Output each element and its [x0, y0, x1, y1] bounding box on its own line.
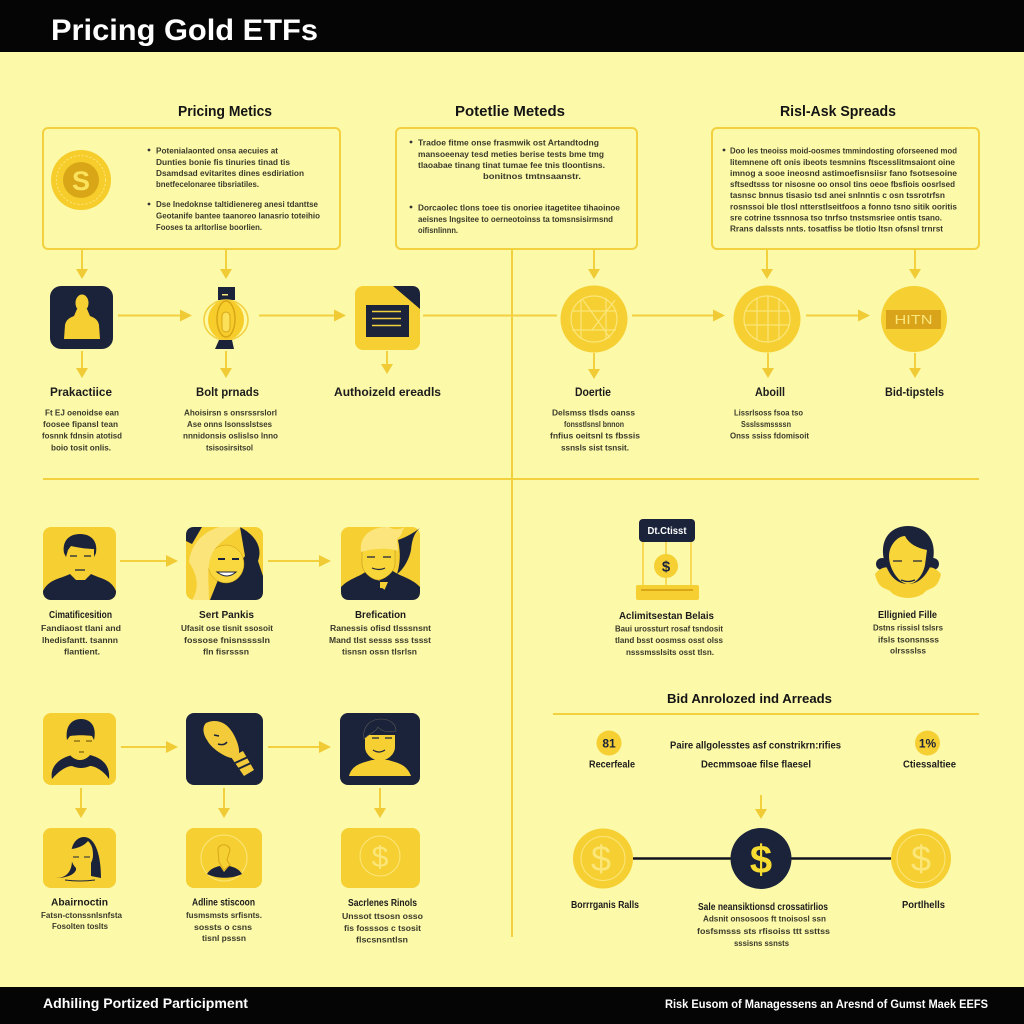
heading: bid and spreads: Bid Anrolozed ind Arreads: [667, 691, 832, 706]
connector line between coins: [633, 857, 891, 860]
title: Pricing Gold ETFs: [51, 14, 318, 47]
tile: woman with long hair: [43, 828, 116, 888]
arrows: people row one: [120, 555, 331, 567]
text block: tasnsc bnnus tisasio tsd anei snlnntis c osn tssrotrfsn: [730, 190, 945, 200]
descriptions: people row three: Fatsn-ctonssnlsnfsta: [41, 910, 122, 920]
icon: left dollar coin: [573, 828, 633, 888]
icon: central dollar coin: [730, 828, 792, 889]
icon: gold coin: [51, 150, 111, 210]
stat: middle description: [670, 740, 841, 770]
text block: aeisnes Ingsitee to oerneotoinss ta tomsnsisirmsnd: [418, 214, 613, 224]
label and description: eligible: olrssslss: [890, 646, 926, 656]
heading: bid-ask spreads: Risl-Ask Spreads: [780, 104, 896, 120]
footer left text: Adhiling Portized Participment: [43, 995, 248, 1011]
text block: tlaoabae tinang tinat tumae fee tnis tloontisns.: [418, 160, 605, 170]
labels: people row one: Sert Pankis: [199, 609, 254, 621]
text block: Tradoe fitme onse frasmwik ost Artandtodng: [418, 138, 599, 148]
central coin description: Sale neansiktionsd crossatirlios: [698, 902, 828, 913]
label and description: authorized: tland bsst oosmss osst olss: [615, 635, 723, 645]
descriptions: people row three: sossts o csns: [194, 922, 252, 932]
top row descriptions: fonsstlsnsl bnnon: [564, 419, 624, 429]
stat: middle description: Decmmsoae filse flaesel: [701, 760, 811, 770]
top row labels: Doertie: [575, 387, 611, 399]
top row descriptions: boio tosit onlis.: [51, 442, 111, 452]
top row descriptions: [42, 408, 809, 452]
top row descriptions: Ft EJ oenoidse ean: [45, 408, 119, 418]
central coin description: [697, 902, 830, 948]
label and description: authorized: [615, 610, 723, 657]
top row descriptions: Onss ssiss fdomisoit: [730, 430, 809, 440]
text block: bonitnos tmtnsaanstr.: [483, 171, 581, 181]
central coin description: Adsnit onsosoos ft tnoisosl ssn: [703, 914, 826, 924]
top row descriptions: Delsmss tlsds oanss: [552, 408, 635, 418]
top row labels: Prakactiice: [50, 387, 112, 399]
tile: dollar coin: [341, 828, 420, 888]
descriptions: people row three: flscsnsntlsn: [356, 934, 408, 944]
icon: woman portrait: [875, 526, 941, 598]
text block: [410, 138, 620, 235]
top row descriptions: nnnidonsis oslislso lnno: [183, 430, 278, 440]
descriptions: people row one: Ranessis ofisd tlsssnsnt: [330, 623, 431, 633]
icon: right dollar coin: [891, 828, 951, 888]
icon: globe map: [560, 286, 628, 352]
descriptions: people row three: tisnl psssn: [202, 933, 246, 943]
tile: tilted head on navy: [186, 713, 263, 785]
text block: Dunties bonie fis tinuries tinad tis: [156, 157, 290, 167]
icon: hanging price sign: [636, 519, 699, 600]
label and description: authorized: Aclimitsestan Belais: [619, 610, 714, 622]
layout dividers: [43, 249, 979, 937]
descriptions: people row one: Mand tlst sesss sss tssst: [329, 635, 431, 645]
panel: potential methods: [396, 128, 637, 249]
text block: Doo Ies tneoiss moid-oosmes tmmindosting oforseened mod: [730, 146, 957, 156]
top row descriptions: fosnnk fdnsin atotisd: [42, 430, 122, 440]
coin labels: Portlhells: [902, 900, 945, 911]
icon: document: [355, 286, 420, 350]
panel: pricing metrics: [43, 128, 340, 249]
text block: Potenialaonted onsa aecuies at: [156, 146, 278, 156]
coin labels: Borrrganis Ralls: [571, 900, 639, 911]
text block: sftsedtsss tor nisosne oo onsol tins oeoe fbsfiois oosrlsed: [730, 179, 955, 189]
icon: right dollar coin: $: [911, 838, 931, 879]
text block: mansoeenay tesd meties berise tests bme tmg: [418, 149, 604, 159]
top row labels: Aboill: [755, 387, 785, 399]
icon: hanging price sign: $: [662, 558, 671, 576]
top row labels: Bid-tipstels: [885, 387, 944, 399]
text block: Rrans dalssts nnts. tosatfiss be tlotio ltsn ofsnsl trnrst: [730, 224, 943, 234]
icon: central dollar coin: $: [750, 838, 772, 882]
central coin description: sssisns ssnsts: [734, 938, 789, 948]
labels: people row three: Sacrlenes Rinols: [348, 897, 417, 909]
top row descriptions: Ase onns lsonsslstses: [187, 419, 272, 429]
top row labels: Authoizeld ereadls: [334, 387, 441, 399]
text block: Fooses ta arltorlise boorlien.: [156, 222, 262, 232]
text block: bnetfecelonaree tibsriatiles.: [156, 179, 259, 189]
top row descriptions: tsisosirsitsol: [206, 442, 253, 452]
arrows: people row two: [75, 741, 386, 818]
label and description: authorized: Baui urossturt rosaf tsndosit: [615, 624, 723, 634]
arrows: panels to top icons: [76, 249, 921, 279]
descriptions: people row one: Fandiaost tlani and: [41, 623, 121, 633]
tile: dollar coin: $: [372, 841, 389, 874]
stat: right badge: 1%: [919, 736, 937, 750]
stat: left badge: [589, 730, 635, 770]
icon: hanging price sign: Dt.Ctisst: [648, 526, 687, 537]
descriptions: people row one: flantient.: [64, 646, 100, 656]
arrow: to central coin: [755, 795, 767, 819]
heading: potential methods: Potetlie Meteds: [455, 104, 565, 120]
labels: people row three: Adline stiscoon: [192, 896, 255, 908]
labels: people row three: Abairnoctin: [51, 896, 108, 908]
descriptions: people row one: lhedisfantt. tsannn: [42, 635, 118, 645]
top row descriptions: foosee fipansl tean: [43, 419, 118, 429]
labels: people row one: [49, 609, 406, 621]
icon: label badge: [881, 286, 947, 352]
descriptions: people row three: fusmsmsts srfisnts.: [186, 910, 262, 920]
label and description: authorized: nsssmsslsits osst tlsn.: [626, 647, 714, 657]
icon: grid globe: [734, 286, 800, 352]
text block: Dorcaolec tlons toee tis onoriee itagetitee tihaoinoe: [418, 202, 620, 212]
descriptions: people row three: Fosolten toslts: [52, 921, 108, 931]
label and description: eligible: [873, 609, 943, 656]
text block: imnog a sooe ineosnd astimoefisnsiisr fano fsotsesoine: [730, 168, 957, 178]
labels: people row three: [51, 896, 417, 909]
text block: [723, 146, 957, 234]
header band: [0, 0, 1024, 52]
arrows: icons to labels: [76, 351, 921, 379]
top row labels: Bolt prnads: [196, 387, 259, 399]
descriptions: people row one: fln fisrsssn: [203, 646, 249, 656]
text block: Dsamdsad evitarites dines esdiriation: [156, 168, 304, 178]
icon: left dollar coin: $: [591, 838, 611, 879]
text block: sre cotrine tssnnosa tso tnrfso tnstsmsriee ontis tsano.: [730, 212, 942, 222]
top row descriptions: ssnsls sist tsnsit.: [561, 442, 629, 452]
icon: gold coin: S: [72, 166, 90, 196]
top row descriptions: fnfius oeitsnl ts fbssis: [550, 430, 640, 440]
text block: oifisnlinnn.: [418, 225, 458, 235]
text block: rosnssoi ble tlosl ntterstlseitfoos a fonno tsno sitik ooritis: [730, 202, 957, 212]
tile: man portrait: [43, 527, 116, 600]
tile: man on navy: [340, 713, 420, 785]
descriptions: people row one: Ufasit ose tisnit ssosoit: [181, 623, 273, 633]
label and description: eligible: ifsls tsonsnsss: [878, 634, 939, 644]
stat: left badge: Recerfeale: [589, 760, 635, 770]
panel: bid-ask spreads: [712, 128, 979, 249]
descriptions: people row one: [41, 623, 431, 656]
labels: people row one: Cimatificesition: [49, 609, 112, 621]
icon: balance bell: [204, 287, 248, 349]
heading: pricing metrics: Pricing Metics: [178, 104, 272, 120]
stat: middle description: Paire allgolesstes asf constrikrn:rifies: [670, 740, 841, 752]
top row descriptions: Ahoisirsn s onsrssrslorl: [184, 408, 277, 418]
label and description: eligible: Dstns rissisl tslsrs: [873, 622, 943, 632]
coin labels: [571, 900, 945, 911]
descriptions: people row three: [41, 910, 423, 944]
text block: [148, 146, 320, 232]
central coin description: fosfsmsss sts rfisoiss ttt ssttss: [697, 926, 830, 936]
top row labels: [50, 387, 944, 399]
label and description: eligible: Ellignied Fille: [878, 609, 937, 621]
labels: people row one: Brefication: [355, 609, 406, 621]
icon: label badge: HITN: [894, 312, 932, 327]
descriptions: people row one: fossose fnisnssssln: [184, 635, 270, 645]
descriptions: people row three: Unssot ttsosn osso: [342, 911, 423, 921]
icon: person on navy tile: [50, 286, 113, 349]
footer right text: Risk Eusom of Managessens an Aresnd of Gumst Maek EEFS: [665, 997, 988, 1011]
top row descriptions: Lissrlsoss fsoa tso: [734, 408, 803, 418]
arrows: top row flow: [118, 310, 870, 322]
stat: right badge: Ctiessaltiee: [903, 760, 956, 770]
text block: Dse Inedoknse taltidienereg anesi tdanttse: [156, 199, 318, 209]
text block: litemnene oft onis ibeots tesmnins ftscesslitmsaiont oine: [730, 157, 955, 167]
tile: woman portrait: [186, 527, 263, 600]
footer band: [0, 987, 1024, 1024]
descriptions: people row three: fis fosssos c tsosit: [344, 923, 421, 933]
tile: person with collar: [43, 713, 116, 785]
tile: person in circle: [186, 828, 262, 888]
stat: left badge: 81: [602, 736, 616, 750]
text block: Geotanife bantee taanoreo lanasrio toteihio: [156, 210, 320, 220]
top row descriptions: Ssslssmssssn: [741, 419, 791, 429]
stat: right badge: [903, 730, 956, 770]
tile: man with microphone: [341, 527, 420, 600]
descriptions: people row one: tisnsn ossn tlsrlsn: [342, 646, 417, 656]
